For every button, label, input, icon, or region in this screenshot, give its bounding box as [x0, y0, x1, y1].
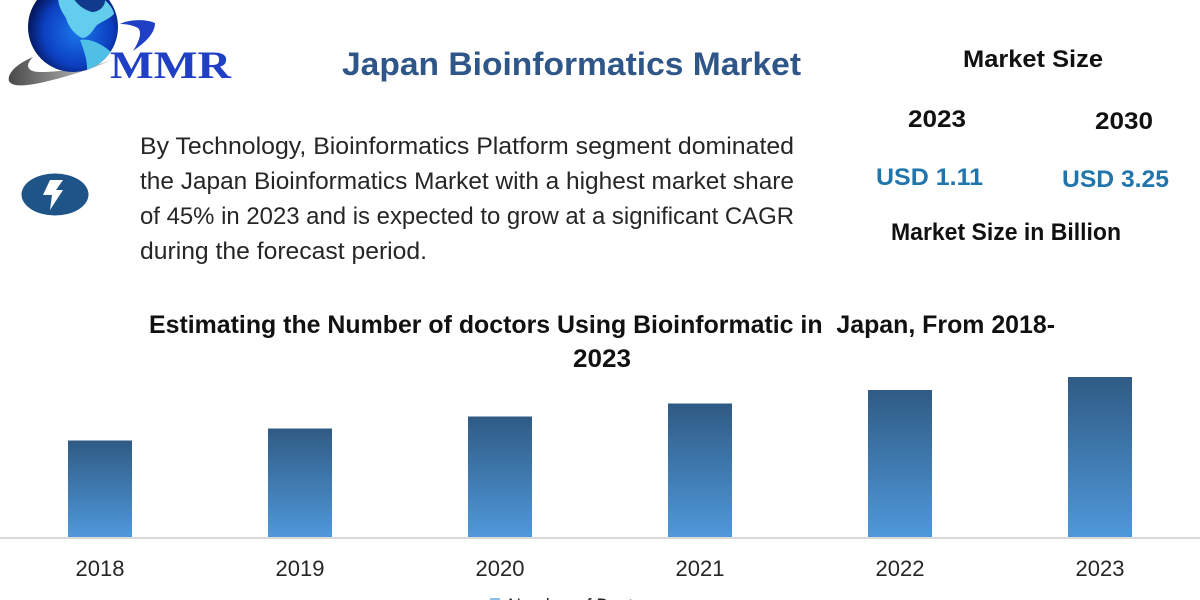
- value 2023: USD 1.11: [876, 164, 983, 191]
- axis labels: 2021: [676, 556, 724, 581]
- bar 2019: [268, 428, 332, 537]
- chart title: [149, 311, 1055, 373]
- chart title: 2023: [573, 345, 631, 373]
- icon: swoosh: [9, 57, 112, 85]
- axis labels: 2023: [1076, 556, 1124, 581]
- text block: segment description: during the forecast period.: [140, 238, 427, 265]
- axis labels: 2022: [876, 556, 924, 581]
- axis labels: [76, 556, 1124, 581]
- logo text: MMR: [110, 44, 232, 87]
- unit note: Market Size in Billion: [891, 219, 1121, 246]
- icon: blue mark: [120, 20, 155, 51]
- panel: market size: [876, 46, 1169, 246]
- axis line: [0, 537, 1200, 539]
- icon: continents: [58, 0, 114, 73]
- bar chart: [0, 377, 1200, 581]
- axis labels: 2020: [476, 556, 524, 581]
- heading: market size: Market Size: [963, 46, 1103, 73]
- text block: segment description: By Technology, Bioinformatics Platform segment dominated: [140, 133, 794, 160]
- bar 2023: [1068, 377, 1132, 537]
- text block: segment description: the Japan Bioinformatics Market with a highest market share: [140, 168, 794, 195]
- value 2030: USD 3.25: [1062, 166, 1169, 193]
- year 2023: 2023: [908, 106, 966, 133]
- chart title: Estimating the Number of doctors Using Bioinformatic in Japan, From 2018-: [149, 311, 1055, 339]
- icon: lightning badge: [22, 174, 88, 216]
- bar 2021: [668, 404, 732, 537]
- text block: segment description: [140, 133, 794, 265]
- bar 2018: [68, 440, 132, 537]
- bar 2020: [468, 416, 532, 537]
- axis labels: 2019: [276, 556, 324, 581]
- icon: globe: [28, 0, 118, 72]
- bar 2022: [868, 390, 932, 537]
- text block: segment description: of 45% in 2023 and is expected to grow at a significant CAGR: [140, 203, 794, 230]
- axis labels: 2018: [76, 556, 124, 581]
- logo: MMR: [9, 0, 232, 87]
- title: Japan Bioinformatics Market: [342, 46, 801, 82]
- year 2030: 2030: [1095, 108, 1153, 135]
